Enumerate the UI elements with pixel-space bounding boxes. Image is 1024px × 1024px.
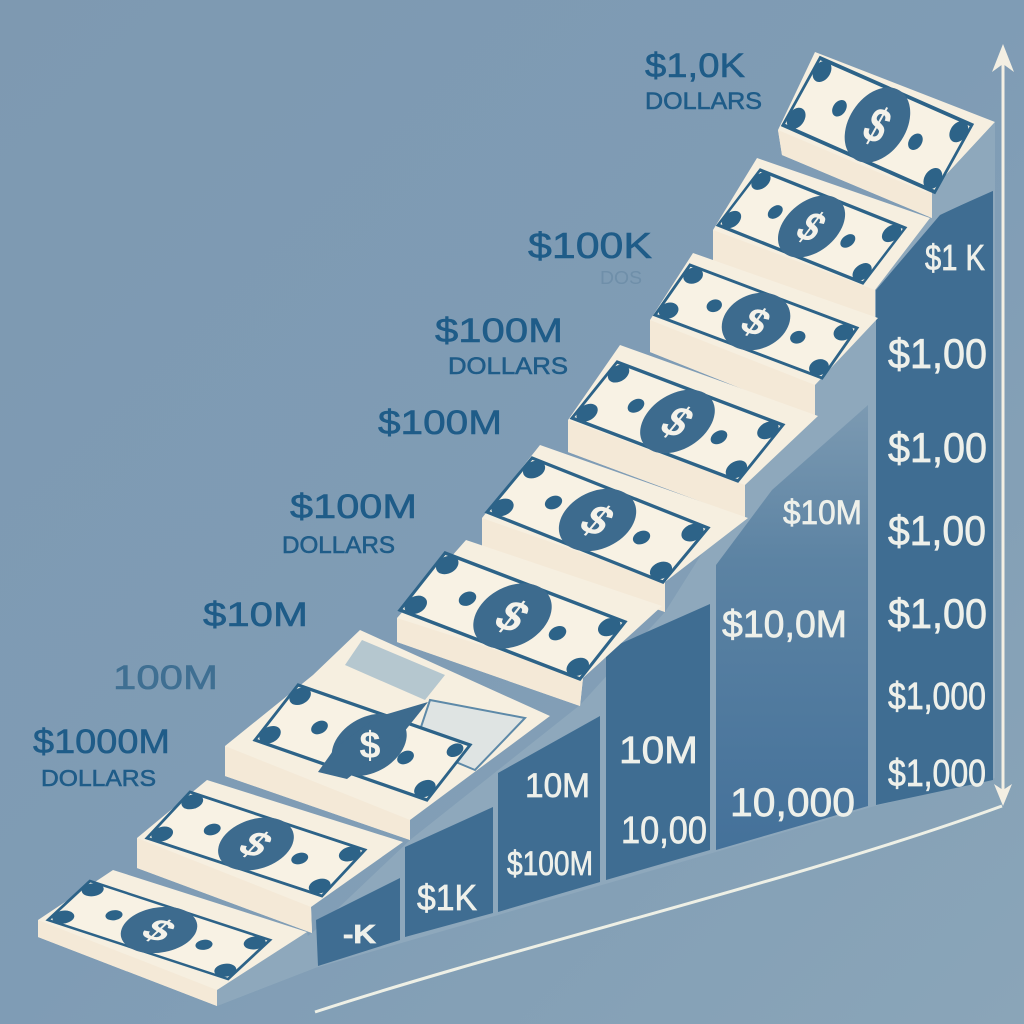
label 5 xyxy=(282,488,417,559)
columns xyxy=(316,190,993,966)
label 8 xyxy=(33,723,170,791)
label 1: $1,0K xyxy=(645,47,745,85)
step 7 with bill: $ xyxy=(732,299,779,345)
column 6: $1,00 xyxy=(888,330,987,377)
left labels xyxy=(33,47,762,791)
column 5: $10M xyxy=(783,494,862,532)
column 4: 10,00 xyxy=(621,810,707,852)
step 1 with bill xyxy=(38,870,315,1006)
step 3 with bill xyxy=(225,630,550,840)
y axis arrow xyxy=(992,44,1014,806)
faded bill right xyxy=(415,700,525,770)
x axis line xyxy=(315,806,1002,1012)
column 6: $1,00 xyxy=(888,424,987,471)
label 8: $1000M xyxy=(33,723,170,761)
label 5: $100M xyxy=(290,488,417,526)
column 3 xyxy=(498,716,600,912)
column 1 xyxy=(316,878,400,966)
step 6 with bill: $ xyxy=(650,397,704,447)
step 9 with bill: $ xyxy=(854,97,900,155)
column 5: 10,000 xyxy=(730,781,855,825)
label 2: DOS xyxy=(600,268,642,288)
label 1: DOLLARS xyxy=(645,88,762,115)
column 4: 10M xyxy=(619,730,698,772)
dollar sign: $ xyxy=(359,725,381,767)
column 6 xyxy=(876,190,993,805)
step 8 with bill: $ xyxy=(787,203,836,251)
column 5 xyxy=(716,405,868,850)
faded bill behind xyxy=(345,640,445,700)
step 8 with bill xyxy=(713,158,930,320)
column 6: $1 K xyxy=(925,237,985,278)
step 1 with bill: $ xyxy=(132,912,185,949)
label 4: $100M xyxy=(378,404,502,442)
bill strap xyxy=(318,702,428,779)
step 2 with bill xyxy=(137,780,403,933)
step 4 with bill xyxy=(397,540,662,706)
label 2: $100K xyxy=(528,225,652,266)
column 1: -K xyxy=(343,919,376,949)
label 8: DOLLARS xyxy=(41,765,156,791)
column 6: $1,00 xyxy=(888,507,986,554)
step 5 with bill xyxy=(482,445,748,612)
label 1 xyxy=(645,47,762,115)
column 6: $1,000 xyxy=(888,676,986,718)
step 5 with bill: $ xyxy=(569,497,624,545)
column 3: 10M xyxy=(525,767,590,805)
label 3 xyxy=(435,312,568,380)
column 3: $100M xyxy=(507,845,593,883)
step 4 with bill: $ xyxy=(484,591,540,642)
label 3: $100M xyxy=(435,312,563,350)
column 5: $10,0M xyxy=(722,604,847,646)
step 9 with bill xyxy=(778,52,995,218)
step 2 with bill: $ xyxy=(229,823,283,865)
staircase side wall xyxy=(217,122,995,1006)
column 2: $1K xyxy=(417,877,477,918)
label 2 xyxy=(528,225,652,288)
column 2 xyxy=(405,807,493,937)
column 6: $1,000 xyxy=(888,753,986,795)
label 7: 100M xyxy=(113,659,218,697)
step 6 with bill xyxy=(568,345,818,518)
column 4 xyxy=(606,604,710,880)
label 3: DOLLARS xyxy=(448,353,568,380)
column 6: $1,00 xyxy=(888,590,987,637)
label 5: DOLLARS xyxy=(282,532,395,559)
label 6: $10M xyxy=(203,596,308,634)
step 7 with bill xyxy=(650,253,878,418)
